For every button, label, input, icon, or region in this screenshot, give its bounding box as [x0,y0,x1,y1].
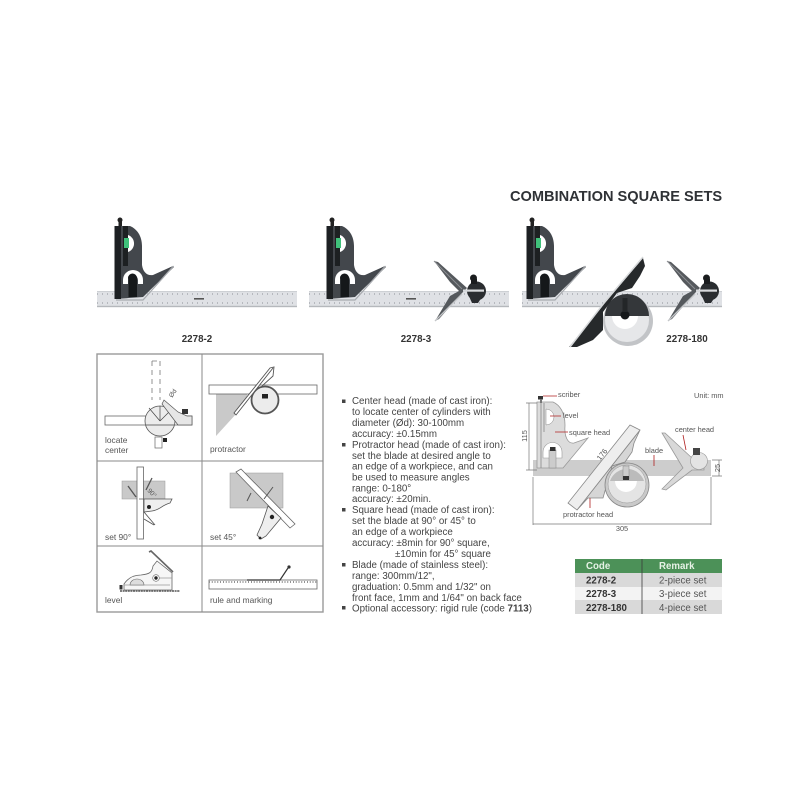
scriber [538,396,543,400]
technical drawing [520,390,724,533]
table: code and remark: 3-piece set [659,589,707,600]
text block: specifications: be used to measure angles [352,472,470,484]
protractor head [569,257,653,347]
technical drawing: level [563,411,579,420]
text block: specifications: front face, 1mm and 1/64" on back face [352,593,522,604]
cell: locate center: center [105,445,128,455]
cell: protractor: protractor [210,444,246,454]
technical drawing: 305 [616,524,628,533]
technical drawing: center head [675,425,714,434]
protractor head outline [577,430,640,510]
technical drawing: 25 [713,464,722,472]
table: code and remark: 2278-180 [586,603,627,614]
center head outline [662,433,704,490]
text block: specifications: Center head (made of cast iron): [352,396,492,407]
text block: specifications: accuracy: ±8min for 90° square, [352,538,490,549]
text block: specifications: Blade (made of stainless steel): [352,560,488,571]
product: 2278-180 [522,218,722,347]
text block: specifications: Protractor head (made of cast iron): [352,440,506,451]
technical drawing: square head [569,428,610,437]
square head outline [537,402,588,468]
product: 2278-3: 2278-3 [401,334,432,345]
cell: set 90 [105,467,172,542]
technical drawing: 176 [595,447,609,462]
cell: set 90: set 90° [105,532,131,542]
cell: set 45: set 45° [210,532,236,542]
cell: rule and marking: rule and marking [210,595,273,605]
dimension lines [526,403,722,525]
technical drawing: 115 [520,430,529,442]
panel: usage diagrams [97,354,323,612]
table: code and remark [575,559,722,614]
cell: locate center [105,361,192,455]
product: 2278-180: 2278-180 [666,334,708,345]
cell: set 45 [210,469,295,542]
text block: specifications: set the blade at 90° or 45° to [352,516,476,527]
table: code and remark: 2278-2 [586,576,616,586]
product: 2278-2: 2278-2 [182,334,213,345]
text block: specifications: accuracy: ±20min. [352,494,431,505]
text block: specifications: Optional accessory: rigid rule (code 7113) [352,604,532,614]
callouts: scriber [558,390,581,399]
text block: specifications: graduation: 0.5mm and 1/32" on [352,582,491,593]
cell: locate center: locate [105,435,128,445]
text block: specifications: Square head (made of cast iron): [352,505,495,516]
cell: level: level [105,595,122,605]
technical drawing: blade [645,446,663,455]
text block: specifications: to locate center of cylinders with [352,407,491,418]
table: code and remark: Code [586,561,611,572]
product: 2278-2 [97,218,297,345]
text block: specifications: range: 300mm/12", [352,571,435,582]
table: code and remark: 2278-3 [586,589,617,600]
text block: specifications: ±10min for 45° square [395,549,491,560]
text block: specifications: diameter (Ød): 30-100mm [352,418,464,429]
table: code and remark: 2-piece set [659,576,707,586]
cell: rule and marking [209,565,317,605]
technical drawing: protractor head [563,510,613,519]
text block: specifications: set the blade at desired angle to [352,451,491,462]
leader lines [543,396,686,508]
text block: specifications: range: 0-180° [352,484,411,494]
technical drawing: Unit: mm [694,391,724,400]
text block: specifications: accuracy: ±0.15mm [352,429,437,440]
table: code and remark: Remark [659,561,695,572]
blade [533,460,711,476]
bullet list markers [342,400,346,610]
text block: specifications: an edge of a workpiece [352,527,453,538]
table: code and remark: 4-piece set [659,603,707,614]
text block: specifications: an edge of a workpiece, and can [352,462,493,472]
text block: specifications [342,396,532,614]
cell: protractor [209,367,317,454]
title: COMBINATION SQUARE SETS [510,189,722,205]
cell: set 90: 90° [146,487,158,500]
cell: locate center: Ød [168,388,179,399]
cell: level [105,551,180,605]
product: 2278-3 [309,218,509,345]
